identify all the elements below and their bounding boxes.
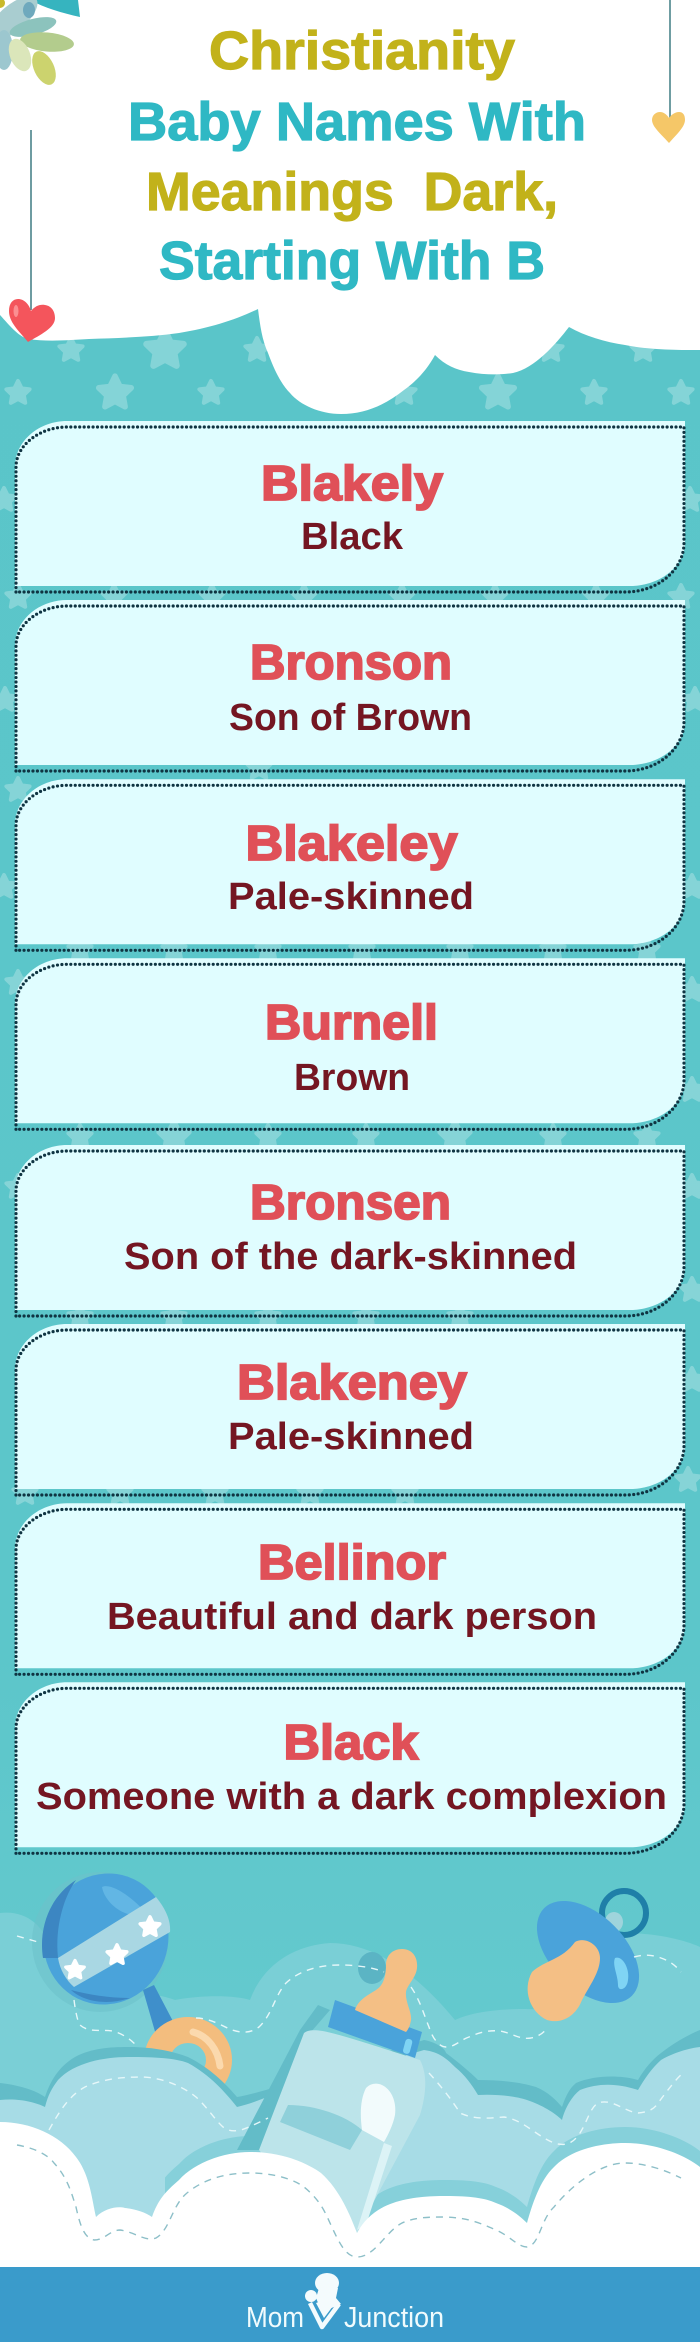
title: Meanings Dark, bbox=[146, 162, 558, 222]
card: Bronson bbox=[15, 600, 685, 771]
card: Black: Black bbox=[284, 1716, 419, 1770]
card: Bellinor: Beautiful and dark person bbox=[107, 1596, 597, 1638]
icon: baby bottle bbox=[237, 1949, 425, 2233]
card: Blakeley bbox=[15, 779, 685, 950]
hanging heart: red bbox=[9, 130, 55, 342]
cloud rim layer bbox=[0, 2030, 700, 2267]
card: Blakely: Black bbox=[301, 516, 404, 558]
card: Blakely bbox=[15, 421, 685, 592]
card: Blakeney: Blakeney bbox=[237, 1356, 467, 1410]
white cloud outer rim bbox=[165, 2127, 700, 2232]
card: Black: Someone with a dark complexion bbox=[36, 1776, 667, 1818]
back cloud layer bbox=[0, 1913, 700, 2267]
pale cloud layer bbox=[0, 2047, 700, 2267]
card: Bellinor: Bellinor bbox=[258, 1536, 446, 1590]
card: Burnell bbox=[15, 958, 685, 1129]
logo: MomJunction: Mom bbox=[246, 2302, 304, 2334]
title: Christianity bbox=[209, 21, 515, 81]
top white cloud bbox=[0, 0, 700, 414]
white foreground cloud bbox=[0, 2122, 700, 2267]
card: Bronsen bbox=[15, 1145, 685, 1316]
card: Blakeley: Blakeley bbox=[246, 817, 458, 871]
card: Bronson: Son of Brown bbox=[229, 697, 472, 739]
card: Blakeley: Pale-skinned bbox=[228, 876, 474, 918]
title bbox=[128, 21, 586, 291]
footer bar bbox=[0, 2267, 700, 2342]
card: Burnell: Brown bbox=[294, 1057, 410, 1099]
card: Bellinor bbox=[15, 1503, 685, 1674]
title: Baby Names With bbox=[128, 92, 586, 152]
hanging heart: yellow bbox=[652, 0, 685, 143]
card: Bronsen: Bronsen bbox=[250, 1176, 451, 1230]
logo: MomJunction bbox=[246, 2273, 444, 2334]
icon: rattle bbox=[25, 1856, 220, 2090]
card: Blakeney bbox=[15, 1324, 685, 1495]
background star pattern bbox=[0, 331, 700, 1503]
logo: MomJunction: Junction bbox=[344, 2302, 444, 2334]
card: Blakely: Blakely bbox=[261, 457, 443, 511]
card: Black bbox=[15, 1682, 685, 1853]
bunting corner bbox=[30, 0, 80, 17]
card: Burnell: Burnell bbox=[265, 996, 438, 1050]
dashed stitching lines bbox=[17, 1936, 683, 2257]
card: Bronson: Bronson bbox=[250, 636, 452, 690]
card: Blakeney: Pale-skinned bbox=[228, 1416, 474, 1458]
icon: pacifier bbox=[518, 1882, 658, 2022]
icon: leaves bbox=[0, 0, 75, 89]
card: Bronsen: Son of the dark-skinned bbox=[124, 1236, 577, 1278]
title: Starting With B bbox=[159, 231, 545, 291]
